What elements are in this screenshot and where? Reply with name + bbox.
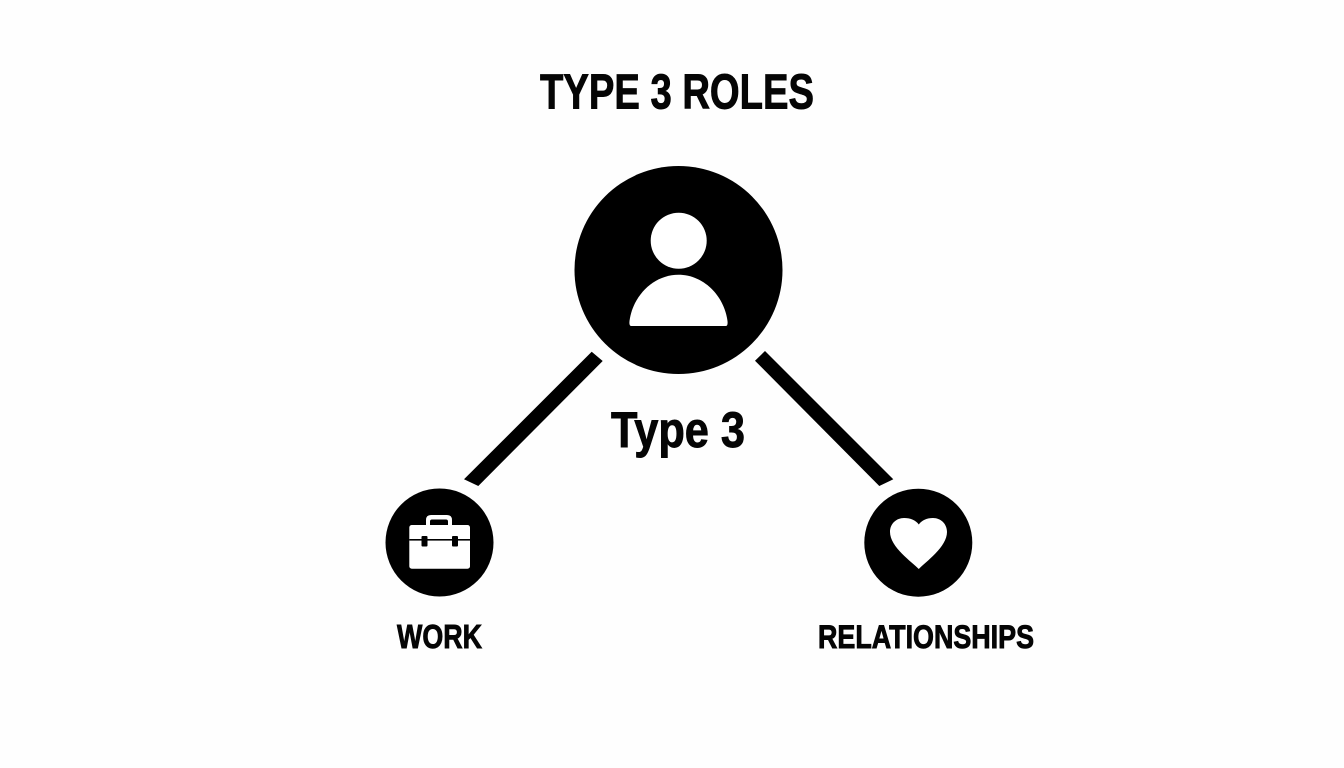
title: TYPE 3 ROLES	[540, 66, 814, 120]
center label: Type 3: Type 3	[611, 402, 745, 458]
label: work: WORK	[397, 618, 482, 655]
icon: work briefcase	[386, 488, 494, 596]
icon: central person circle	[574, 166, 782, 374]
label: relationships: RELATIONSHIPS	[818, 619, 1034, 655]
connector: to relationships	[755, 351, 893, 486]
icon: relationships heart	[864, 489, 972, 597]
connector: to work	[464, 352, 603, 486]
